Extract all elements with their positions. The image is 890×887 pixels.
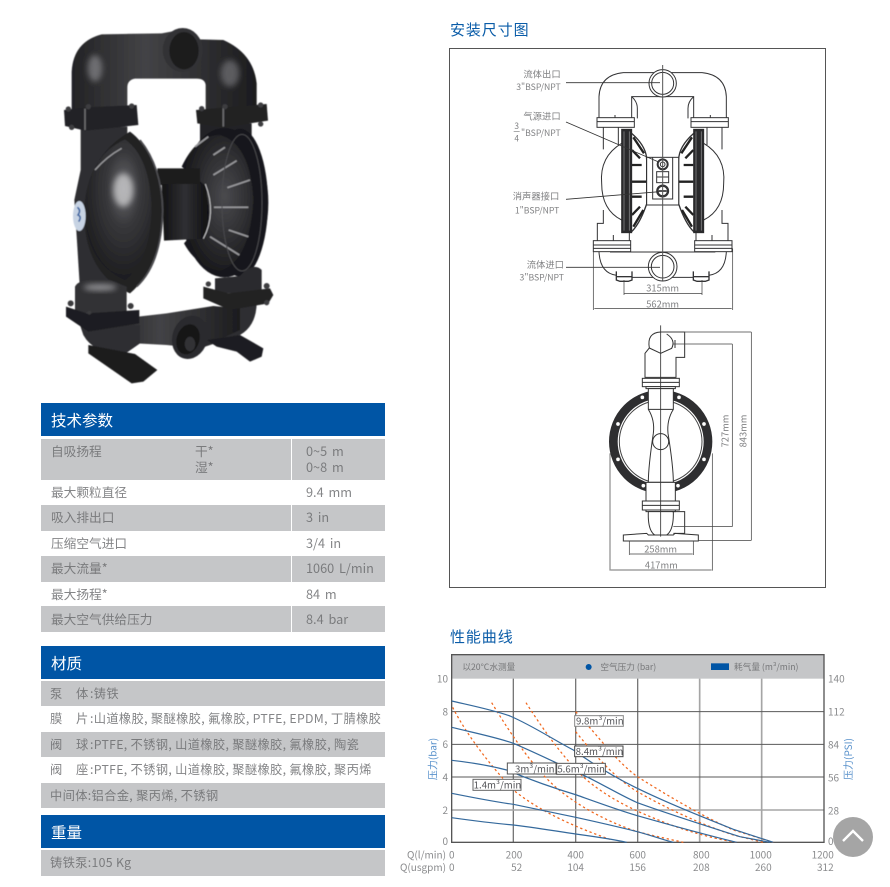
axis labels: 0 xyxy=(449,859,455,874)
diaphragm ring xyxy=(613,394,708,489)
heading: weight: 重量 xyxy=(51,821,82,843)
diagram: side view xyxy=(609,325,752,572)
pressure axis titles: 压力(bar) xyxy=(424,738,439,780)
axis labels: 0 xyxy=(449,847,455,862)
axis labels: 28 xyxy=(828,803,840,818)
axis labels xyxy=(400,670,845,874)
flow curve labels: 1.4m³/min xyxy=(474,777,521,791)
flow curve labels: 3m³/min xyxy=(515,761,555,775)
lower manifold xyxy=(107,306,240,355)
row: pump body: 泵 xyxy=(50,684,62,702)
dimension lines xyxy=(593,248,733,310)
axis labels: 1200 xyxy=(812,847,834,862)
row: valve seat: 座 xyxy=(76,760,88,778)
axis labels: 140 xyxy=(828,670,845,685)
row: valve seat: 阀 xyxy=(50,760,62,778)
axis labels: 200 xyxy=(506,847,523,862)
axis labels: 400 xyxy=(567,847,584,862)
chart: performance curves xyxy=(400,654,855,874)
panel: dimension drawing frame xyxy=(449,48,826,588)
dimension labels: 流体进口 xyxy=(527,257,564,271)
row: inlet and outlet: 3 in xyxy=(306,507,329,526)
axis labels: 208 xyxy=(693,859,710,874)
axis labels: 800 xyxy=(693,847,710,862)
centre axis xyxy=(659,325,662,537)
heading: technical parameters: 技术参数 xyxy=(51,409,113,431)
chart legend bar: 以20°C水测量 xyxy=(462,661,516,673)
icon: back to top button xyxy=(833,817,873,857)
axis labels: 56 xyxy=(828,770,840,785)
left half xyxy=(593,73,663,281)
axis labels: 52 xyxy=(511,859,523,874)
axis labels: 6 xyxy=(442,736,448,751)
row: middle body xyxy=(41,783,385,808)
row: self-priming lift: 干* xyxy=(195,441,214,460)
dimension labels: "BSP/NPT xyxy=(521,127,561,139)
axis labels: 84 xyxy=(828,737,840,752)
row: middle body: 中间体:铝合金, 聚丙烯, 不锈钢 xyxy=(50,786,218,804)
left housing xyxy=(84,132,164,293)
pump body outline xyxy=(623,332,698,541)
dimension labels: 1"BSP/NPT xyxy=(515,204,559,216)
flow curve labels: 5.6m³/min xyxy=(557,762,605,776)
centre block xyxy=(647,157,679,205)
diagram: front view xyxy=(513,65,734,310)
row: cast iron pump weight xyxy=(41,850,385,876)
heading: materials xyxy=(41,646,385,679)
heading: installation dimensions: 安装尺寸图 xyxy=(450,19,530,40)
row: max particle size: 最大颗粒直径 xyxy=(51,482,127,501)
fluid outlet port xyxy=(649,70,676,97)
row: max flow: 1060 L/min xyxy=(306,558,374,577)
upper manifold xyxy=(72,29,257,110)
heading: performance curves: 性能曲线 xyxy=(450,626,514,647)
row: valve ball: :PTFE, 不锈钢, 山道橡胶, 聚醚橡胶, 氟橡胶, 陶瓷 xyxy=(90,735,359,753)
row: self-priming lift xyxy=(41,439,385,480)
dimension labels: 流体出口 xyxy=(523,67,561,81)
left column xyxy=(74,127,127,290)
axis labels: 0 xyxy=(828,833,834,848)
fluid inlet port xyxy=(648,252,677,281)
dimension lines xyxy=(610,332,751,571)
row: max air supply pressure xyxy=(41,606,385,632)
row: diaphragm: 片 xyxy=(76,709,88,727)
chart legend bar: 空气压力 (bar) xyxy=(600,661,656,673)
dimension labels: 消声器接口 xyxy=(513,189,559,203)
row: max flow: 最大流量* xyxy=(51,558,108,577)
row: self-priming lift: 自吸扬程 xyxy=(51,441,102,460)
dimension labels: 562mm xyxy=(646,296,679,310)
lower left flange xyxy=(66,307,139,332)
pressure axis titles xyxy=(424,738,855,780)
row: cast iron pump weight: 铸铁泵:105 Kg xyxy=(50,853,131,871)
row: max particle size: 9.4 mm xyxy=(306,482,352,501)
row: compressed air inlet xyxy=(51,533,341,552)
blue air pressure curves xyxy=(452,701,773,842)
inlet port xyxy=(166,311,214,364)
dimension labels: 843mm xyxy=(736,415,750,447)
row: pump body: :铸铁 xyxy=(90,684,119,702)
row: valve ball: 球 xyxy=(76,735,88,753)
flow curve labels: 8.4m³/min xyxy=(576,744,623,758)
orange efficiency curves xyxy=(453,703,773,842)
row: self-priming lift: 0~8 m xyxy=(306,457,344,476)
axis labels: 312 xyxy=(817,859,834,874)
axis labels: 600 xyxy=(629,847,646,862)
row: compressed air inlet: 压缩空气进口 xyxy=(51,533,127,552)
flow curve labels xyxy=(473,714,624,791)
nameplate xyxy=(73,201,86,231)
flow curve labels: 9.8m³/min xyxy=(576,714,624,728)
axis labels: Q(usgpm) xyxy=(400,859,446,874)
upper flanges xyxy=(64,105,138,131)
dimension labels: 258mm xyxy=(644,542,677,556)
row: self-priming lift: 0~5 m xyxy=(306,441,344,460)
axis labels: 156 xyxy=(629,859,646,874)
chart legend bar: 耗气量 (m³/min) xyxy=(734,661,798,673)
axis labels: 4 xyxy=(442,769,448,784)
axis labels: 104 xyxy=(567,859,584,874)
right column xyxy=(200,123,252,157)
row: max head: 最大扬程* xyxy=(51,584,108,603)
row: valve seat: :PTFE, 不锈钢, 山道橡胶, 聚醚橡胶, 氟橡胶, 聚丙烯 xyxy=(90,760,372,778)
centre axis xyxy=(661,65,664,281)
lower right elbow xyxy=(215,267,262,293)
row: inlet and outlet xyxy=(41,505,385,531)
row: pump body: 体 xyxy=(76,684,88,702)
dimension labels xyxy=(644,415,750,572)
lower left elbow xyxy=(75,279,127,313)
row: max air supply pressure: 最大空气供给压力 xyxy=(51,609,152,628)
product photo: diaphragm pump xyxy=(63,27,274,384)
axis labels: 10 xyxy=(437,670,448,685)
dimension labels: 417mm xyxy=(645,558,678,572)
chart legend bar xyxy=(452,655,824,679)
row: diaphragm: :山道橡胶, 聚醚橡胶, 氟橡胶, PTFE, EPDM, 丁腈橡胶 xyxy=(90,709,381,727)
axis labels: 260 xyxy=(755,859,772,874)
row: inlet and outlet: 吸入排出口 xyxy=(51,507,114,526)
dimension labels: 气源进口 xyxy=(523,109,561,123)
feet xyxy=(88,345,157,383)
axis labels: 112 xyxy=(828,703,845,718)
row: max particle size xyxy=(51,482,352,501)
dimension labels: 727mm xyxy=(718,415,732,447)
axis labels: 0 xyxy=(442,833,448,848)
centre block and cylinder xyxy=(157,168,200,185)
row: compressed air inlet: 3/4 in xyxy=(306,533,341,552)
row: max head: 84 m xyxy=(306,584,337,603)
dimension labels: 3"BSP/NPT xyxy=(516,81,561,93)
pressure axis titles: 压力(PSI) xyxy=(840,738,855,780)
row: max head xyxy=(51,584,337,603)
dimension labels xyxy=(513,67,679,310)
dimension labels: 3 xyxy=(514,120,519,132)
row: max air supply pressure: 8.4 bar xyxy=(306,609,348,628)
right lower flange xyxy=(203,287,273,310)
heading: weight xyxy=(41,815,385,848)
mirrored right half xyxy=(663,73,732,281)
axis labels: 8 xyxy=(442,703,448,718)
leader lines xyxy=(566,83,660,267)
row: self-priming lift: 湿* xyxy=(195,457,214,476)
row: pump body xyxy=(41,681,385,706)
row: max flow xyxy=(41,556,385,582)
axis labels: Q(l/min) xyxy=(407,847,446,862)
dimension labels: 3"BSP/NPT xyxy=(520,272,564,284)
axis labels: 1000 xyxy=(750,847,772,862)
axis labels: 2 xyxy=(442,802,448,817)
dimension labels: 4 xyxy=(514,132,519,144)
right housing silhouette xyxy=(180,128,268,277)
row: valve ball xyxy=(41,732,385,757)
dimension labels: 315mm xyxy=(646,281,679,295)
heading: materials: 材质 xyxy=(51,652,82,674)
heading: technical parameters xyxy=(41,403,385,436)
row: valve ball: 阀 xyxy=(50,735,62,753)
row: diaphragm: 膜 xyxy=(50,709,62,727)
